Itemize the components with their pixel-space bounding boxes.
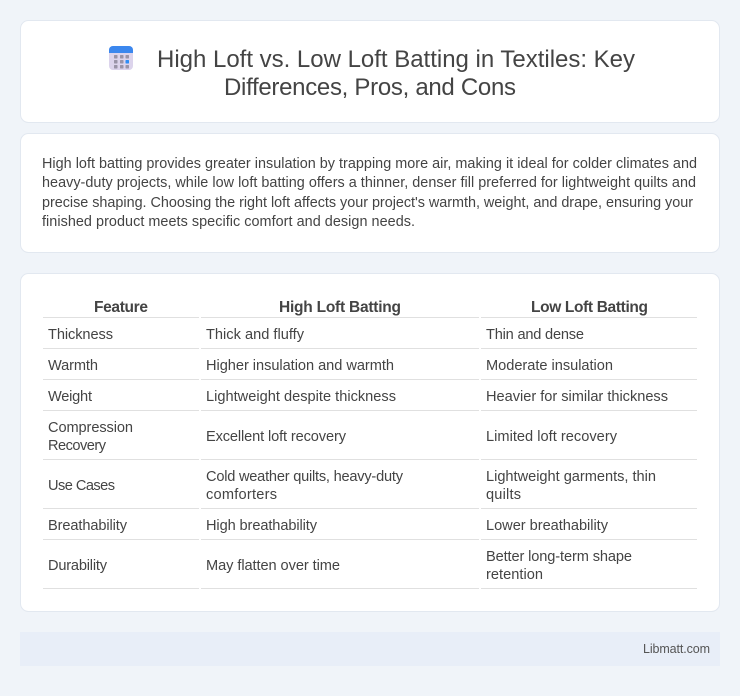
row: breathability: Lower breathability xyxy=(486,518,609,534)
table header xyxy=(94,299,648,316)
text block: summary paragraph: finished product meets specific comfort and design needs. xyxy=(42,214,415,230)
row: use cases: Cold weather quilts, heavy-duty xyxy=(206,469,404,485)
row: durability xyxy=(48,549,632,583)
row: thickness: Thick and fluffy xyxy=(206,327,305,343)
row: durability: retention xyxy=(486,567,543,583)
panel: title card xyxy=(20,20,720,122)
panel: comparison table xyxy=(20,274,720,612)
text block: summary paragraph: High loft batting provides greater insulation by trapping more air, making it ideal for colder climates and xyxy=(42,156,697,172)
row: thickness: Thickness xyxy=(48,327,113,343)
row: breathability: High breathability xyxy=(206,518,318,534)
row: warmth: Warmth xyxy=(48,358,98,374)
row: durability: May flatten over time xyxy=(206,558,340,574)
row: warmth: Moderate insulation xyxy=(486,358,613,374)
text block: summary paragraph: heavy-duty projects, while low loft batting offers a thinner, denser fill preferred for lightweight quilts and xyxy=(42,175,696,191)
row: use cases: Lightweight garments, thin xyxy=(486,469,656,485)
row: use cases: quilts xyxy=(486,487,521,503)
row: warmth xyxy=(48,358,613,374)
row: compression recovery: Compression xyxy=(48,420,133,436)
row: breathability: Breathability xyxy=(48,518,128,534)
title: High Loft vs. Low Loft Batting in Textiles: Key xyxy=(157,46,635,73)
row: breathability xyxy=(48,518,609,534)
row: durability: Durability xyxy=(48,558,108,574)
panel: summary text xyxy=(20,134,720,252)
footer xyxy=(20,632,720,666)
row: thickness: Thin and dense xyxy=(486,327,584,343)
row: compression recovery xyxy=(48,420,618,454)
row: weight: Heavier for similar thickness xyxy=(486,389,668,405)
footer credit: Libmatt.com xyxy=(643,642,710,656)
title: Differences, Pros, and Cons xyxy=(224,74,516,101)
row: use cases: Use Cases xyxy=(48,478,115,494)
row: use cases xyxy=(48,469,656,503)
text block: summary paragraph xyxy=(42,156,697,230)
row: warmth: Higher insulation and warmth xyxy=(206,358,394,374)
table header: Low Loft Batting xyxy=(531,299,648,316)
table header: High Loft Batting xyxy=(279,299,401,316)
title xyxy=(157,46,635,101)
text block: summary paragraph: precise shaping. Choosing the right loft affects your project's warmth, weight, and drape, ensuring your xyxy=(42,195,693,211)
table grid lines xyxy=(43,317,697,589)
row: durability: Better long-term shape xyxy=(486,549,632,565)
row: compression recovery: Recovery xyxy=(48,438,107,454)
icon: calendar xyxy=(109,46,133,70)
row: compression recovery: Limited loft recovery xyxy=(486,429,618,445)
table header: Feature xyxy=(94,299,148,316)
row: compression recovery: Excellent loft recovery xyxy=(206,429,347,445)
row: thickness xyxy=(48,327,584,343)
row: use cases: comforters xyxy=(206,487,277,503)
row: weight: Lightweight despite thickness xyxy=(206,389,396,405)
row: weight xyxy=(48,389,668,405)
row: weight: Weight xyxy=(48,389,92,405)
